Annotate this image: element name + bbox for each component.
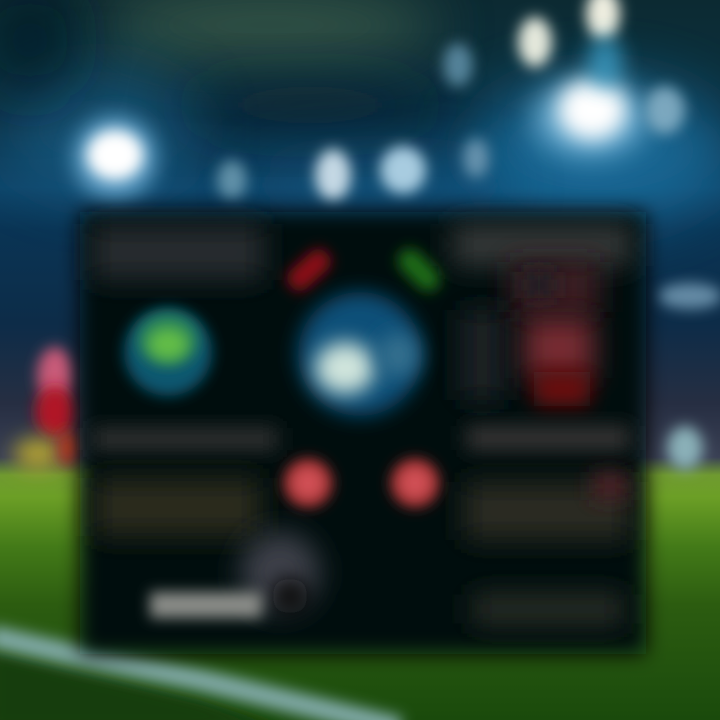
text block: top right <box>452 224 632 266</box>
icon: red pill <box>282 244 336 296</box>
player in pale kit <box>667 426 703 470</box>
icon: central blue circle <box>298 292 422 416</box>
icon: right red circle <box>390 458 440 508</box>
text block: top left <box>92 224 264 280</box>
text block: middle right <box>464 426 630 540</box>
text block: bottom right <box>472 594 624 624</box>
text block: right column <box>460 310 504 400</box>
icon: green circle <box>124 308 212 396</box>
chart: red figure <box>510 262 600 406</box>
pitch line <box>0 636 400 720</box>
icon: football <box>240 532 320 614</box>
player in red <box>14 347 78 470</box>
icon: left red circle <box>283 458 333 508</box>
text block: middle left <box>92 428 278 536</box>
stadium floodlights <box>73 0 720 309</box>
icon: green pill <box>393 244 445 296</box>
panel: main dark card <box>80 212 646 654</box>
text block: bright caption <box>150 592 262 618</box>
